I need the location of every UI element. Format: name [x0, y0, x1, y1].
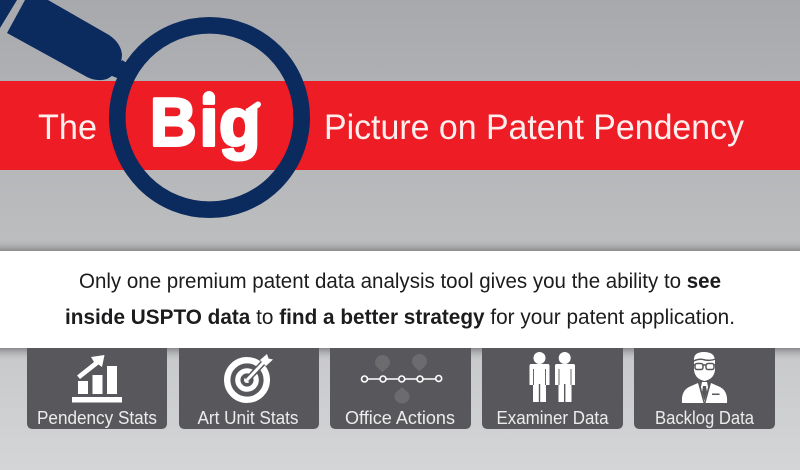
red title band	[0, 81, 800, 170]
title	[38, 84, 744, 160]
title word: Big: g	[219, 84, 261, 160]
panel: Office Actions	[330, 348, 471, 429]
label: Pendency Stats	[37, 408, 157, 428]
panel: Art Unit Stats	[179, 348, 319, 429]
panel: white message band	[0, 251, 800, 348]
label: Backlog Data	[655, 408, 755, 428]
icon: person with glasses and tie	[682, 352, 727, 403]
icon: target with arrow	[227, 354, 273, 400]
label: Office Actions	[345, 408, 455, 428]
icon: timeline	[362, 376, 442, 382]
message text: Only one premium patent data analysis tool gives you the ability to see	[79, 269, 721, 293]
message text	[65, 269, 735, 329]
label: Art Unit Stats	[198, 408, 298, 428]
message text: inside USPTO data to find a better strategy for your patent application.	[65, 305, 735, 329]
label: Examiner Data	[496, 408, 609, 428]
icon: faint markers	[375, 354, 427, 404]
title word: Big: B	[150, 84, 197, 160]
icon: two figures	[530, 352, 575, 402]
icon: magnifying glass	[0, 0, 302, 210]
icon: rising bar chart	[72, 355, 122, 402]
title word: Big: i	[200, 84, 218, 160]
panel: Pendency Stats	[27, 348, 167, 429]
panel: Examiner Data	[482, 348, 623, 429]
title word: Big	[150, 84, 261, 160]
white band shadow	[0, 250, 800, 350]
title: The	[38, 108, 97, 147]
title: Picture on Patent Pendency	[324, 108, 744, 147]
panel: Backlog Data	[634, 348, 775, 429]
